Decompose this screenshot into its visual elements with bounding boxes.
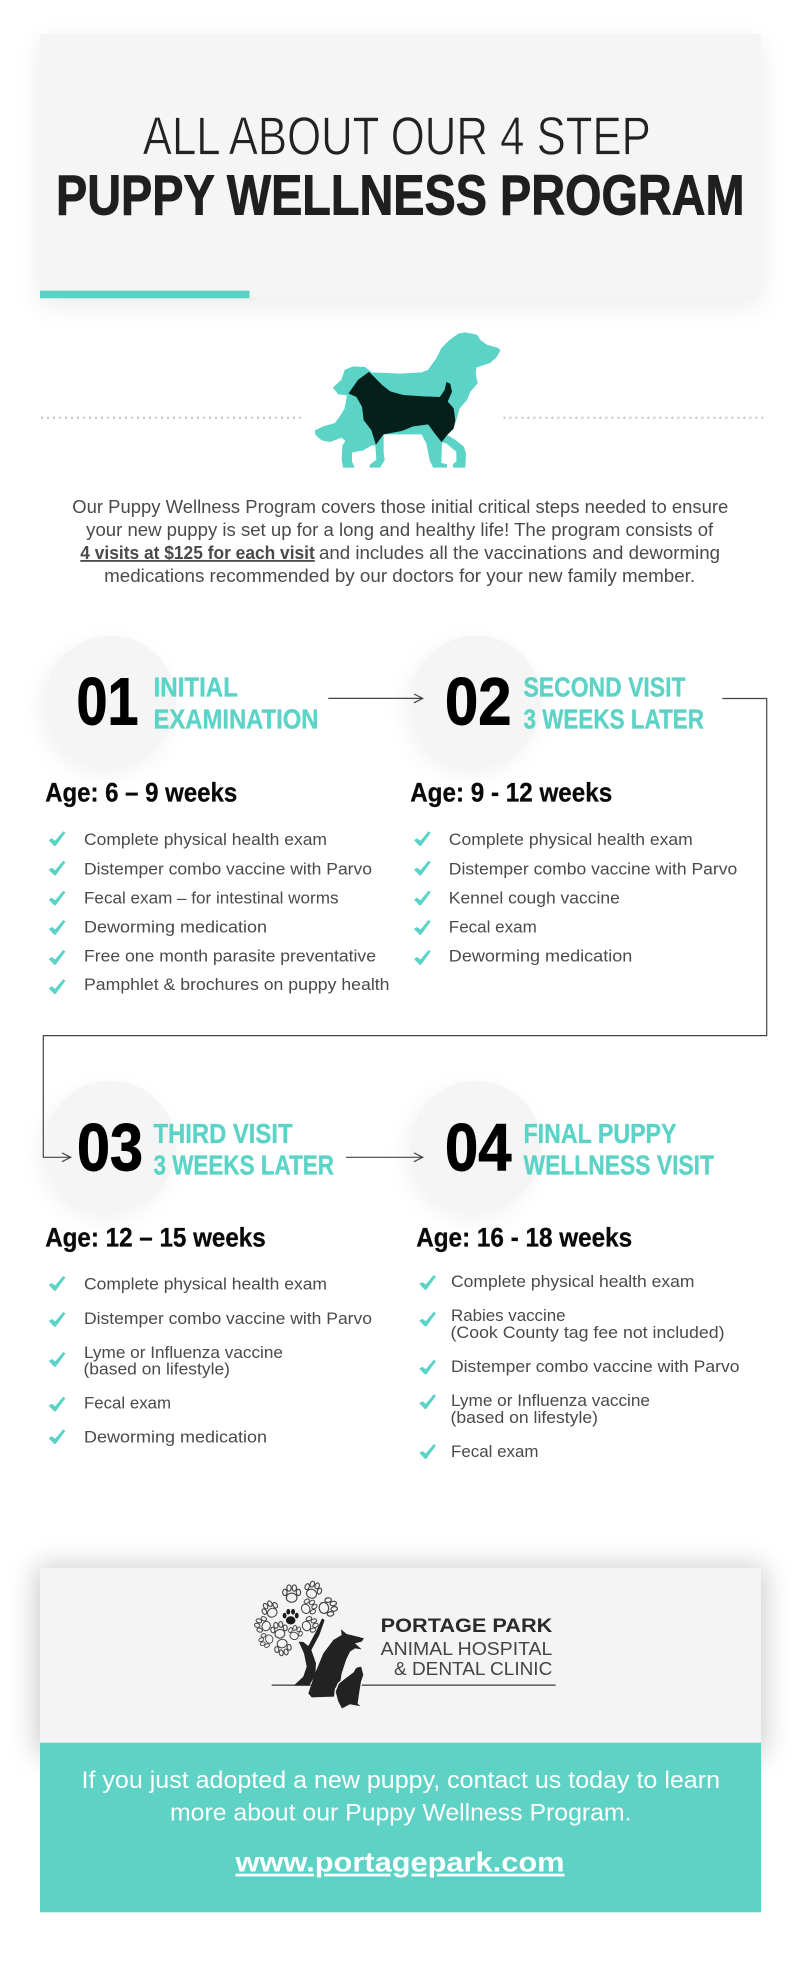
number badge [40, 636, 176, 775]
step 02 [405, 636, 737, 965]
number badge: 04 [445, 1110, 512, 1186]
accent bar [40, 291, 250, 298]
age heading: Age: 12 – 15 weeks [45, 1223, 266, 1253]
checklist: Deworming medication [84, 918, 267, 936]
checklist: Free one month parasite preventative [84, 947, 376, 965]
intro paragraph: your new puppy is set up for a long and healthy life! The program consists of [86, 520, 714, 540]
logo mark [253, 1579, 556, 1709]
checklist [49, 1276, 372, 1447]
number badge [40, 1081, 176, 1220]
number badge [405, 636, 542, 775]
checklist: Lyme or Influenza vaccine [84, 1344, 283, 1362]
checklist [414, 831, 737, 965]
title: ALL ABOUT OUR 4 STEP [143, 108, 651, 166]
connector arrow: step 1 to 2 [328, 694, 423, 703]
checklist: Deworming medication [84, 1429, 267, 1447]
checklist: Fecal exam [449, 918, 537, 936]
age heading: Age: 6 – 9 weeks [45, 778, 237, 808]
number badge: 01 [76, 664, 138, 740]
age heading: Age: 9 - 12 weeks [410, 778, 612, 808]
checklist: Distemper combo vaccine with Parvo [449, 860, 737, 878]
checklist: Pamphlet & brochures on puppy health [84, 976, 390, 994]
step heading: WELLNESS VISIT [524, 1150, 714, 1180]
call to action [40, 1743, 761, 1912]
step heading: SECOND VISIT [524, 672, 686, 702]
connector arrow: step 3 to 4 [346, 1153, 423, 1162]
panel: footer [36, 1566, 765, 1912]
logo wordmark: & DENTAL CLINIC [394, 1659, 552, 1679]
step heading: INITIAL [154, 672, 238, 702]
age heading: Age: 16 - 18 weeks [416, 1223, 632, 1253]
panel: header [40, 34, 761, 305]
checklist [419, 1273, 740, 1461]
logo wordmark [381, 1616, 553, 1679]
checklist: Complete physical health exam [84, 831, 327, 849]
intro paragraph: and includes all the vaccinations and deworming [319, 543, 720, 563]
step heading: THIRD VISIT [154, 1118, 292, 1149]
dotted divider left [41, 417, 302, 419]
checklist: Complete physical health exam [84, 1276, 327, 1294]
checklist: Fecal exam [451, 1443, 538, 1461]
number badge: 02 [445, 664, 512, 740]
step 04 [405, 1081, 740, 1461]
step heading [154, 672, 318, 734]
cta text [82, 1767, 720, 1827]
step heading: 3 WEEKS LATER [154, 1150, 334, 1180]
step heading [524, 672, 704, 734]
website link: www.portagepark.com [234, 1847, 565, 1878]
step heading: FINAL PUPPY [524, 1118, 677, 1149]
logo wordmark: PORTAGE PARK [381, 1616, 553, 1637]
checklist: Distemper combo vaccine with Parvo [451, 1358, 740, 1376]
icon: two dogs silhouette [315, 333, 500, 467]
step 01 [40, 636, 390, 994]
checklist: Distemper combo vaccine with Parvo [84, 860, 372, 878]
checklist: Kennel cough vaccine [449, 889, 620, 907]
checklist: Fecal exam [84, 1395, 171, 1413]
step heading [524, 1118, 714, 1180]
intro paragraph: 4 visits at $125 for each visit [80, 543, 315, 563]
checklist [49, 831, 389, 994]
checklist: Complete physical health exam [451, 1273, 694, 1291]
step heading [154, 1118, 334, 1180]
checklist: Distemper combo vaccine with Parvo [84, 1310, 372, 1328]
logo wordmark: ANIMAL HOSPITAL [381, 1639, 552, 1659]
checklist: Deworming medication [449, 947, 632, 965]
connector line: step 2 to 3 [43, 698, 767, 1162]
cta text: If you just adopted a new puppy, contact us today to learn [82, 1767, 720, 1794]
step heading: EXAMINATION [154, 704, 318, 734]
number badge: 03 [77, 1110, 143, 1186]
step 03 [40, 1081, 372, 1447]
dotted divider right [503, 417, 766, 419]
intro paragraph: medications recommended by our doctors for your new family member. [104, 566, 695, 586]
title [56, 108, 744, 228]
cta text: more about our Puppy Wellness Program. [170, 1800, 632, 1827]
checklist: (based on lifestyle) [450, 1409, 598, 1427]
checklist: (based on lifestyle) [84, 1361, 230, 1379]
intro paragraph [72, 497, 728, 586]
checklist: (Cook County tag fee not included) [450, 1324, 724, 1342]
checklist: Lyme or Influenza vaccine [451, 1392, 650, 1410]
logo: Portage Park Animal Hospital [253, 1579, 556, 1709]
number badge [405, 1081, 542, 1220]
checklist: Rabies vaccine [451, 1307, 566, 1325]
checklist: Fecal exam – for intestinal worms [84, 889, 338, 907]
step heading: 3 WEEKS LATER [524, 704, 704, 734]
checklist: Complete physical health exam [449, 831, 693, 849]
intro paragraph: Our Puppy Wellness Program covers those initial critical steps needed to ensure [72, 497, 728, 517]
